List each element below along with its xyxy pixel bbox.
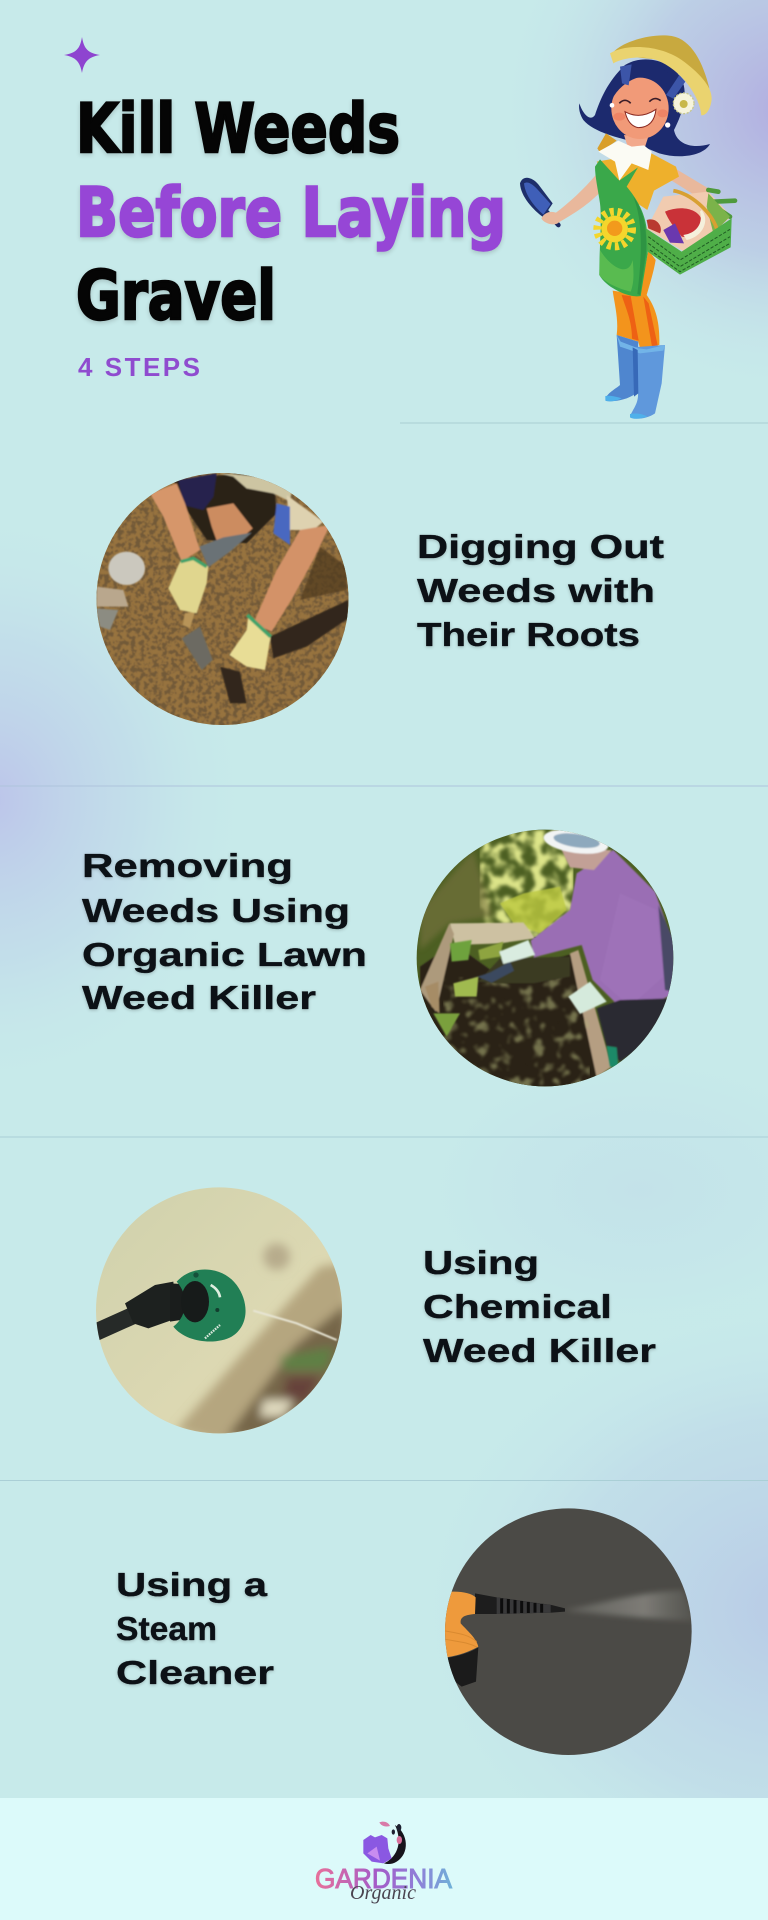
white collar [598,141,652,181]
step 2 heading [82,847,367,1016]
step 2 heading: Removing [82,847,293,884]
step 2 heading: Weeds Using [82,892,350,929]
steam gun handle [445,1592,478,1686]
step 1 photo: digging out weeds [93,470,353,730]
hair [579,59,710,156]
hat back [612,35,709,88]
sunflower [597,212,632,246]
step 4 heading: Using a [116,1566,268,1603]
hair strand on shoulder [597,133,617,153]
logo wordmark: GARDENIA [315,1863,452,1894]
flower in hair [673,93,694,114]
green apron [595,159,648,296]
step 4 heading [116,1566,274,1691]
step 4 heading: Cleaner [116,1654,274,1691]
step 1 heading: Weeds with [417,572,655,609]
footer band [0,1798,768,1920]
icon: purple sparkle [64,37,100,73]
divider [0,1136,768,1138]
step 2 photo: person weeding a raised bed [413,826,680,1097]
yellow shirt [597,153,679,210]
logo: Gardenia Organic [315,1822,452,1904]
divider under header [400,422,768,424]
step 4 heading: Steam [116,1610,217,1647]
step 4 photo: steam cleaner [440,1503,697,1760]
subtitle: 4 steps: 4 STEPS [78,352,200,382]
title [76,90,506,336]
divider [0,1480,768,1481]
legs [613,250,659,348]
icon: trowel [520,178,558,225]
step 1 heading: Their Roots [417,616,640,653]
step 2 heading: Weed Killer [82,979,316,1016]
logo script: Organic [350,1882,416,1904]
steam plume [567,1590,697,1622]
hat brim [610,47,712,115]
step 1 heading: Digging Out [417,528,664,565]
divider [0,786,768,787]
title: Before Laying [76,174,506,253]
step 3 heading: Using [423,1244,539,1281]
step 3 heading: Weed Killer [423,1332,656,1369]
boots [605,335,665,419]
neck [624,135,648,157]
left arm [541,174,602,224]
right arm [672,169,708,202]
hose and fitting [96,1282,184,1340]
green nozzle [173,1269,246,1342]
step 1 heading [417,528,664,653]
step 2 heading: Organic Lawn [82,936,367,973]
spray jet [253,1311,337,1340]
basket of vegetables [646,190,735,275]
steam gun nozzle [475,1593,565,1614]
step 3 heading: Chemical [423,1288,612,1325]
title: Gravel [76,257,276,336]
step 3 photo: nozzle spraying chemical [93,1183,347,1443]
illustration: gardener with basket [520,35,735,419]
face [610,64,685,139]
step 3 heading [423,1244,656,1369]
logo mark [363,1822,406,1864]
title: Kill Weeds [76,90,400,169]
